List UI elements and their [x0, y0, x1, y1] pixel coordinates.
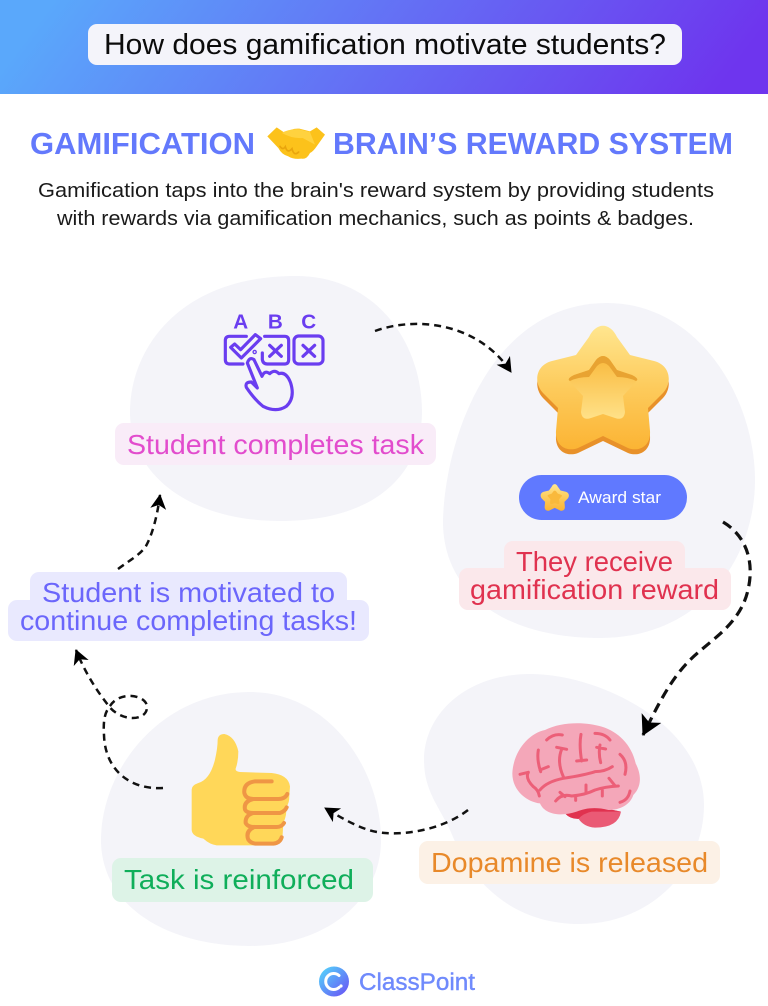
- label: student completes task: [115, 423, 436, 465]
- label: student is motivated: continue completing tasks!: [20, 605, 357, 636]
- arrow: motivated to task: [118, 495, 160, 569]
- label: task is reinforced: [112, 858, 373, 902]
- icon: quiz choices with pointing hand: A: [233, 311, 248, 334]
- label: they receive gamification reward: gamification reward: [470, 574, 719, 605]
- panel: student completes task: [115, 276, 436, 521]
- icon: quiz choices with pointing hand: B: [268, 311, 283, 334]
- arrow: reinforced to motivated with loop: [76, 650, 163, 788]
- icon: brain: [512, 723, 640, 828]
- button: award star: Award star: [578, 489, 662, 507]
- title: GAMIFICATION: [30, 126, 255, 161]
- label: dopamine is released: [419, 841, 720, 884]
- title: BRAIN’S REWARD SYSTEM: [333, 126, 733, 161]
- icon: quiz choices with pointing hand: [225, 311, 323, 410]
- panel: dopamine released: [419, 674, 720, 924]
- logo: ClassPoint: [319, 966, 475, 996]
- icon: quiz choices with pointing hand: C: [301, 311, 316, 334]
- intro text: with rewards via gamification mechanics, such as points & badges.: [56, 207, 694, 230]
- label: dopamine is released: Dopamine is released: [431, 847, 708, 878]
- icon: thumbs up: [192, 734, 290, 845]
- icon: gold star: [537, 326, 669, 454]
- arrow: task to reward: [375, 324, 511, 372]
- label: student is motivated: [8, 572, 369, 641]
- header banner: How does gamification motivate students?: [104, 29, 666, 61]
- icon: handshake: [267, 127, 325, 159]
- button: award star: [519, 475, 687, 520]
- label: they receive gamification reward: [459, 541, 731, 610]
- label: student completes task: Student completes task: [127, 429, 425, 460]
- arrow: dopamine to reinforced: [325, 808, 468, 833]
- panel: task reinforced: [101, 692, 381, 946]
- panel: gamification reward: [443, 303, 755, 638]
- label: student is motivated: Student is motivated to: [42, 577, 335, 608]
- intro text: Gamification taps into the brain's reward system by providing students: [38, 179, 714, 202]
- logo: ClassPoint: ClassPoint: [359, 969, 475, 996]
- icon: small star: [541, 484, 569, 511]
- label: task is reinforced: Task is reinforced: [124, 864, 354, 895]
- header banner: [0, 0, 768, 94]
- title: [30, 126, 733, 161]
- arrow: reward to dopamine: [643, 522, 750, 735]
- label: they receive gamification reward: They receive: [516, 546, 673, 577]
- intro text: [38, 179, 714, 230]
